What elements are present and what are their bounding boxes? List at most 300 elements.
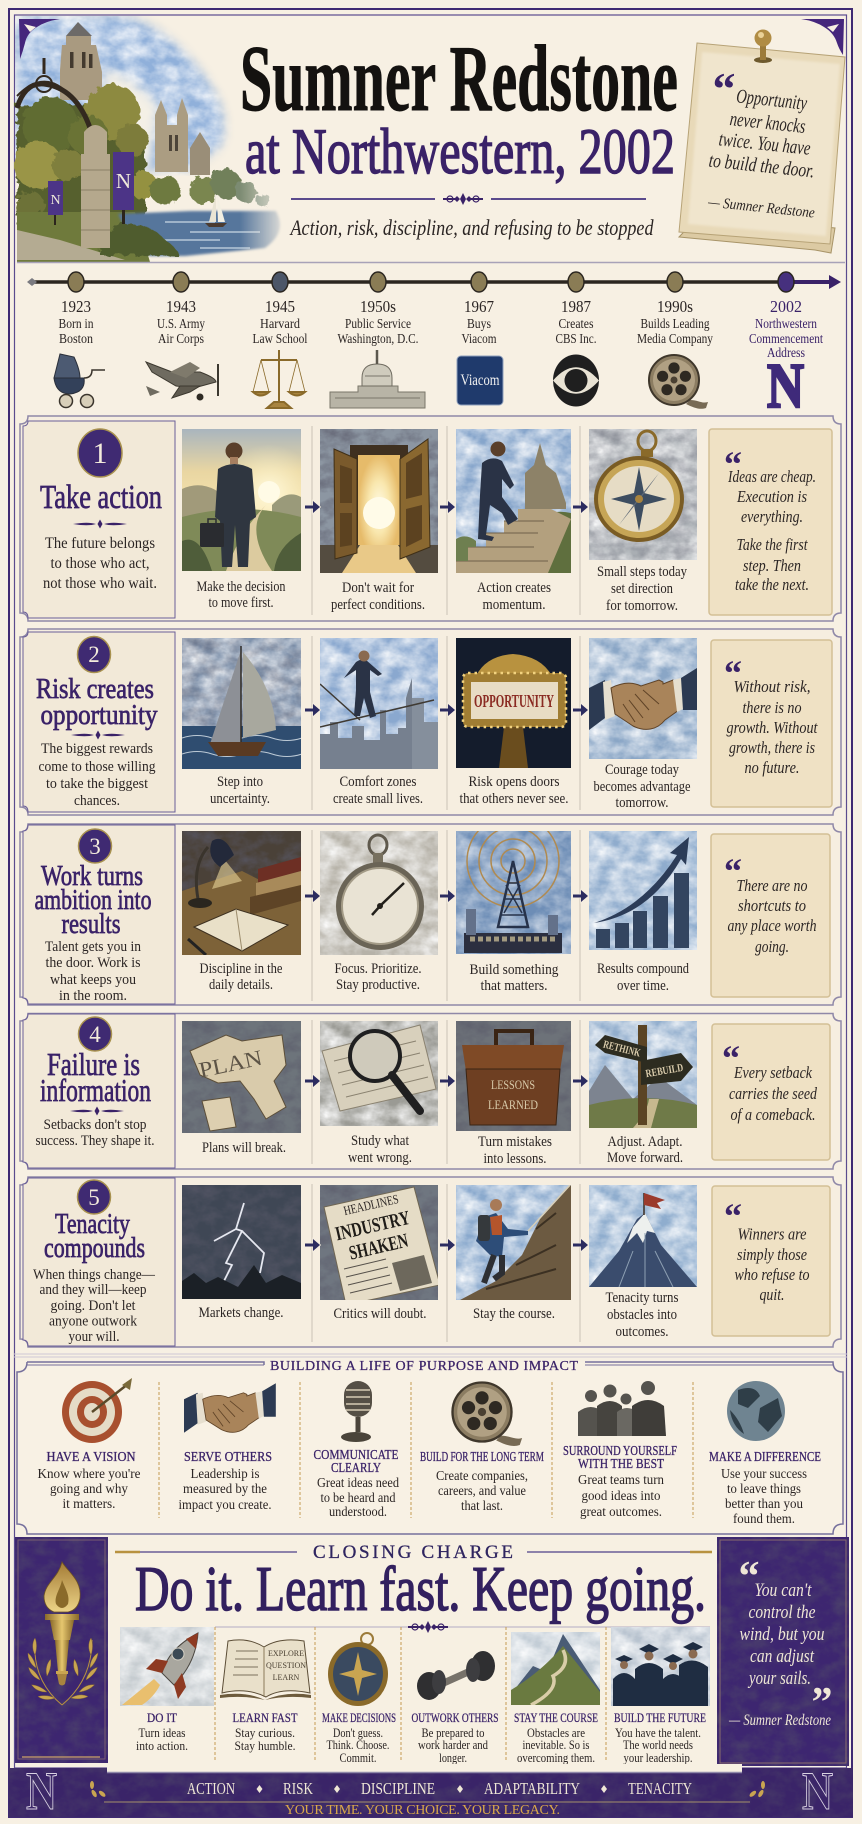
quote card: shortcuts to [738,896,806,915]
timeline [27,272,841,421]
description: to take the biggest [46,776,149,792]
quote text: You can't [754,1580,812,1601]
item: make a difference: found them. [733,1511,795,1526]
1923 [58,297,94,346]
caption 4: Results compound [597,961,690,977]
caption 4 [597,564,688,614]
item: serve others: impact you create. [178,1497,272,1512]
1943 [157,297,205,346]
icon: laurel wreath [26,1638,99,1705]
column: make decisions: Commit. [340,1751,376,1765]
item: make a difference: MAKE A DIFFERENCE [709,1450,821,1465]
number badge: 2 [88,642,100,667]
image: compass [589,429,697,560]
image: man facing sunrise [182,429,301,571]
quote card: no future. [744,758,800,777]
image: desk lamp and book [182,831,301,955]
arrows [305,501,588,513]
tagline: YOUR TIME. YOUR CHOICE. YOUR LEGACY. [285,1803,560,1818]
bell tower [60,22,102,100]
heading: results [62,908,120,940]
caption 4: Tenacity turns [606,1290,679,1306]
description: the door. Work is [46,955,141,971]
description: come to those willing [38,759,156,775]
column: make decisions: Think. Choose. [326,1738,390,1752]
note text: Opportunity [735,85,808,115]
N left: N [26,1761,57,1821]
image: sailboat [182,638,301,769]
image: lessons toolbox [456,1021,571,1131]
column: do it: Turn ideas [138,1726,186,1740]
caption 4: over time. [617,978,669,994]
number badge: 3 [89,834,101,859]
icon: handshake [184,1383,276,1433]
2002: Address [767,345,805,360]
left cell [23,1014,175,1168]
1945: Law School [252,331,308,346]
item: build for the long term: BUILD FOR THE LONG TERM [420,1450,544,1465]
image: signpost: RETHINK [602,1039,642,1060]
panel 4: failure is information [20,1014,841,1169]
value words: ACTION [187,1779,235,1798]
quote text: control the [748,1602,816,1623]
1987: Creates [558,316,594,331]
panel 2: risk creates opportunity [20,629,841,815]
image: torn plan [182,1021,301,1133]
1987: 1987 [561,297,591,316]
caption 4 [606,1290,679,1340]
caption 4: Adjust. Adapt. [608,1134,682,1150]
caption 3: Risk opens doors [468,774,560,790]
column: build the future: You have the talent. [615,1726,701,1740]
heading [34,860,152,940]
banner small: N [50,193,61,208]
quote card: carries the seed [729,1084,818,1103]
ornament [70,1106,124,1116]
1967: Viacom [462,331,497,346]
timeline axis [27,275,841,289]
attribution: — Sumner Redstone [728,1712,831,1729]
ornament [73,520,127,528]
caption 1: Markets change. [198,1305,284,1321]
quote card: “ [724,851,742,891]
quote card: simply those [737,1245,807,1264]
column: stay the course: inevitable. So is [522,1738,590,1752]
icon: pram [54,354,105,408]
pin [754,30,772,63]
image: signpost [589,1021,697,1128]
caption 2: Comfort zones [340,774,417,790]
description: going. Don't let [50,1298,136,1314]
item: have a vision [38,1450,140,1511]
item: communicate clearly: CLEARLY [331,1461,381,1476]
pinned quote note [679,30,845,253]
quote card: who refuse to [734,1265,810,1284]
sailboat [205,194,227,227]
item: make a difference: Use your success [721,1466,807,1481]
image: lessons toolbox: LESSONS [491,1077,535,1092]
item: serve others: Leadership is [190,1466,260,1481]
image: rocket [120,1627,214,1706]
description: to those who act, [50,555,150,572]
image: rising bar chart [589,831,697,950]
caption 1 [210,774,270,807]
number badge [78,1017,112,1051]
number badge: 5 [88,1185,100,1210]
icon: globe [727,1381,785,1441]
value words [187,1779,692,1798]
note text: never knocks [729,108,807,138]
quote card: any place worth [728,916,816,935]
caption 4: for tomorrow. [606,598,678,614]
heading: Take action [40,479,162,516]
caption 3: Turn mistakes [478,1134,552,1150]
description: When things change— [33,1267,156,1283]
image: graduates [611,1627,710,1706]
item: surround yourself with the best [563,1444,677,1519]
quote text: wind, but you [740,1624,824,1645]
caption 4: outcomes. [616,1324,668,1340]
item: build for the long term [420,1450,544,1513]
section heading: BUILDING A LIFE OF PURPOSE AND IMPACT [270,1359,578,1374]
illustration: Northwestern campus [14,16,280,262]
item: surround yourself with the best: SURROUND YOURSELF [563,1444,677,1459]
heading: Risk creates [36,673,154,705]
closing quote mark: ” [812,1680,832,1726]
caption 3: momentum. [482,597,546,613]
description [38,741,156,809]
column: stay the course: Obstacles are [527,1726,585,1740]
caption 1: Plans will break. [202,1140,286,1156]
trees [14,84,270,225]
column: do it: into action. [136,1739,188,1753]
heading: Work turns [41,860,143,892]
1950s: Public Service [345,316,411,331]
icon: team silhouettes [578,1381,666,1436]
number badge: 1 [92,437,108,470]
caption 2 [331,580,425,613]
panel: closing charge [108,1537,718,1770]
panel 5: tenacity compounds [20,1177,841,1347]
caption 3 [460,774,568,807]
column: stay the course: overcoming them. [517,1751,595,1765]
quote card: “ [724,653,742,693]
image: radio tower [456,831,571,954]
caption 3: Stay the course. [473,1306,555,1322]
value words: TENACITY [628,1779,692,1798]
quote card: take the next. [735,575,809,594]
caption 4: Small steps today [597,564,688,580]
title: at Northwestern, 2002 [245,116,675,188]
description: success. They shape it. [36,1133,154,1149]
1945: Harvard [260,316,300,331]
icon: plane [146,362,218,400]
1967: 1967 [464,297,494,316]
left cell [23,825,175,1004]
item: communicate clearly [314,1448,399,1519]
quote card: growth, there is [729,738,815,757]
item: serve others: measured by the [183,1481,267,1496]
quote card: there is no [742,698,802,717]
1987 [556,297,596,346]
1990s: Builds Leading [640,316,710,331]
caption 3: Build something [470,962,558,978]
section label: CLOSING CHARGE [313,1542,513,1563]
icon: film reel [649,355,708,409]
N right: N [802,1761,833,1821]
title divider [291,190,646,208]
heading [40,1046,151,1108]
item: have a vision: it matters. [62,1496,116,1511]
panel: building a life of purpose and impact [17,1359,843,1534]
hero banner [14,16,845,262]
caption 4: obstacles into [607,1307,677,1323]
1923: Born in [58,316,94,331]
ornament [71,730,125,740]
image: open book: EXPLORE [268,1649,304,1658]
banner large [113,152,134,224]
image: newspaper: HEADLINES [342,1191,400,1218]
item: surround yourself with the best: Great teams turn [578,1472,664,1487]
column: learn fast: Stay humble. [234,1739,296,1753]
quote card: “ [724,1196,742,1236]
1987: CBS Inc. [556,331,596,346]
caption 1: Make the decision [196,579,286,595]
column: build the future: The world needs [623,1738,693,1752]
opening quote mark: “ [738,1554,760,1600]
column: build the future [614,1710,706,1765]
quote card: Take the first [736,535,808,554]
arrows [305,1239,588,1251]
image: opportunity marquee [456,638,571,768]
caption 2: Don't wait for [342,580,414,596]
description [43,535,157,592]
description [36,1117,154,1149]
item: serve others: SERVE OTHERS [184,1450,272,1465]
caption 3: that matters. [480,978,548,994]
image: newspaper: SHAKEN [347,1230,411,1265]
image: compass [328,1632,388,1706]
image: torn plan: PLAN [197,1045,264,1083]
item: make a difference: better than you [725,1496,803,1511]
heading: Failure is [47,1046,140,1082]
laurel right [748,1781,765,1798]
number badge [78,429,122,477]
column: make decisions: Don't guess. [333,1726,383,1740]
description: Talent gets you in [45,939,141,955]
caption 1: Discipline in the [200,961,282,977]
corner ornament left [19,19,60,59]
heading: Tenacity [55,1209,130,1240]
caption 2 [348,1133,412,1166]
image: open book: QUESTION [266,1661,306,1670]
corner ornament right [801,19,844,55]
timeline nodes [68,272,794,292]
caption 2 [333,774,423,807]
1990s [637,297,713,346]
caption 3: that others never see. [460,791,568,807]
column: stay the course [514,1710,598,1765]
panel 3: work turns ambition into results [20,815,841,1005]
item: surround yourself with the best: good ideas into [582,1488,661,1503]
image: climber [456,1185,571,1300]
item: make a difference [709,1450,821,1526]
item: make a difference: to leave things [727,1481,801,1496]
image: man climbing stairs [456,429,571,573]
1943: 1943 [166,297,196,316]
caption 3: Action creates [477,580,551,596]
description: The biggest rewards [41,741,153,757]
quote card: Ideas are cheap. [727,467,816,486]
column: outwork others: OUTWORK OTHERS [412,1710,498,1725]
chapel [155,98,210,175]
quote card: “ [724,444,742,484]
caption 2: Study what [351,1133,409,1149]
quote mark: “ [712,63,736,114]
heading [36,673,158,731]
caption 2: perfect conditions. [331,597,425,613]
image: magnifier [320,1021,438,1126]
description [33,1267,156,1345]
quote card: everything. [741,507,803,526]
caption 4 [607,1134,683,1166]
title [240,27,678,188]
bush [100,224,178,256]
column: outwork others: longer. [439,1751,467,1765]
quote card: quit. [760,1285,784,1304]
heading: compounds [44,1233,145,1264]
quote card [711,834,830,997]
icon: target [62,1378,132,1443]
item: surround yourself with the best: WITH THE BEST [578,1457,664,1472]
column: make decisions: MAKE DECISIONS [322,1710,396,1725]
value words: DISCIPLINE [361,1779,435,1798]
column: build the future: your leadership. [624,1751,692,1765]
quote card: growth. Without [726,718,818,737]
panel: closing quote [717,1537,849,1766]
description [45,939,141,1004]
quote card: step. Then [743,556,801,575]
item: have a vision: going and why [50,1481,128,1496]
number badge [78,829,112,863]
heading: ambition into [34,884,152,916]
description: chances. [74,793,120,809]
caption 3 [477,580,551,613]
image: mountain flag [589,1185,697,1287]
panel 1: take action [20,416,841,621]
quote card: “ [722,1038,740,1078]
path [17,230,125,260]
icon: scales [253,350,305,408]
column: learn fast: Stay curious. [235,1726,295,1740]
banner large: N [116,169,131,193]
quote text: can adjust [750,1646,815,1667]
1990s: 1990s [657,297,693,316]
image: mountain path [511,1632,600,1705]
caption 4: set direction [611,581,674,597]
laurel left [90,1781,107,1798]
image: stopwatch [320,831,438,955]
left cell [23,421,175,618]
caption 1: to move first. [208,595,274,611]
column: build the future: BUILD THE FUTURE [614,1710,706,1725]
1945: 1945 [265,297,295,316]
footer band [9,1761,853,1821]
caption 1 [200,961,282,993]
heading: information [40,1072,151,1108]
item: communicate clearly: to be heard and [320,1490,396,1505]
subtitle: Action, risk, discipline, and refusing to be stopped [289,215,654,240]
side rules [115,1551,712,1553]
icon: Viacom logo [457,356,503,405]
caption 1: uncertainty. [210,791,270,807]
caption 3 [470,962,558,994]
icon: CBS eye [553,354,599,406]
arrows [305,1075,588,1087]
banner small [48,181,63,225]
icon: capitol [330,350,425,408]
image: storm [182,1185,301,1299]
item: have a vision: Know where you're [38,1466,140,1481]
description: what keeps you [50,972,136,988]
image: open book: LEARN [273,1673,300,1682]
1945 [252,297,308,346]
quote text: your sails. [747,1668,811,1689]
caption 4 [594,762,690,811]
1950s: Washington, D.C. [338,331,418,346]
column: outwork others [412,1710,498,1765]
quote card [709,429,832,615]
1950s [338,297,418,346]
description: and they will—keep [40,1282,146,1298]
caption 3 [478,1134,552,1167]
item: build for the long term: careers, and value [438,1483,526,1498]
arrows [305,890,588,902]
quote card: Winners are [738,1224,806,1244]
image: newspaper [320,1185,438,1300]
caption 2: Stay productive. [336,977,420,993]
item: have a vision: HAVE A VISION [46,1450,136,1465]
icon: microphone [341,1381,372,1442]
1943: Air Corps [158,331,204,346]
note text: to build the door. [708,150,815,183]
divider [215,1621,710,1633]
description: not those who wait. [43,575,157,592]
arrows [305,704,588,716]
item: communicate clearly: COMMUNICATE [314,1448,398,1463]
quote card: Without risk, [734,677,810,696]
number badge: 4 [89,1022,101,1047]
column: do it [136,1710,188,1753]
1990s: Media Company [637,331,713,346]
caption 2: Critics will doubt. [334,1306,426,1322]
quote card: going. [755,937,789,956]
item: build for the long term: that last. [461,1498,503,1513]
quote text [740,1580,824,1689]
image: open door [320,429,438,573]
note attribution: — Sumner Redstone [707,194,816,222]
quote card: of a comeback. [730,1105,816,1124]
panel: torch [15,1537,108,1763]
1943: U.S. Army [157,316,205,331]
description: anyone outwork [49,1314,137,1330]
icon: film reel [452,1382,522,1446]
icon: Northwestern N: N [767,350,804,421]
icon: torch [44,1562,80,1686]
caption 3: into lessons. [484,1151,546,1167]
caption 4: becomes advantage [594,779,690,795]
quote card [711,640,832,807]
